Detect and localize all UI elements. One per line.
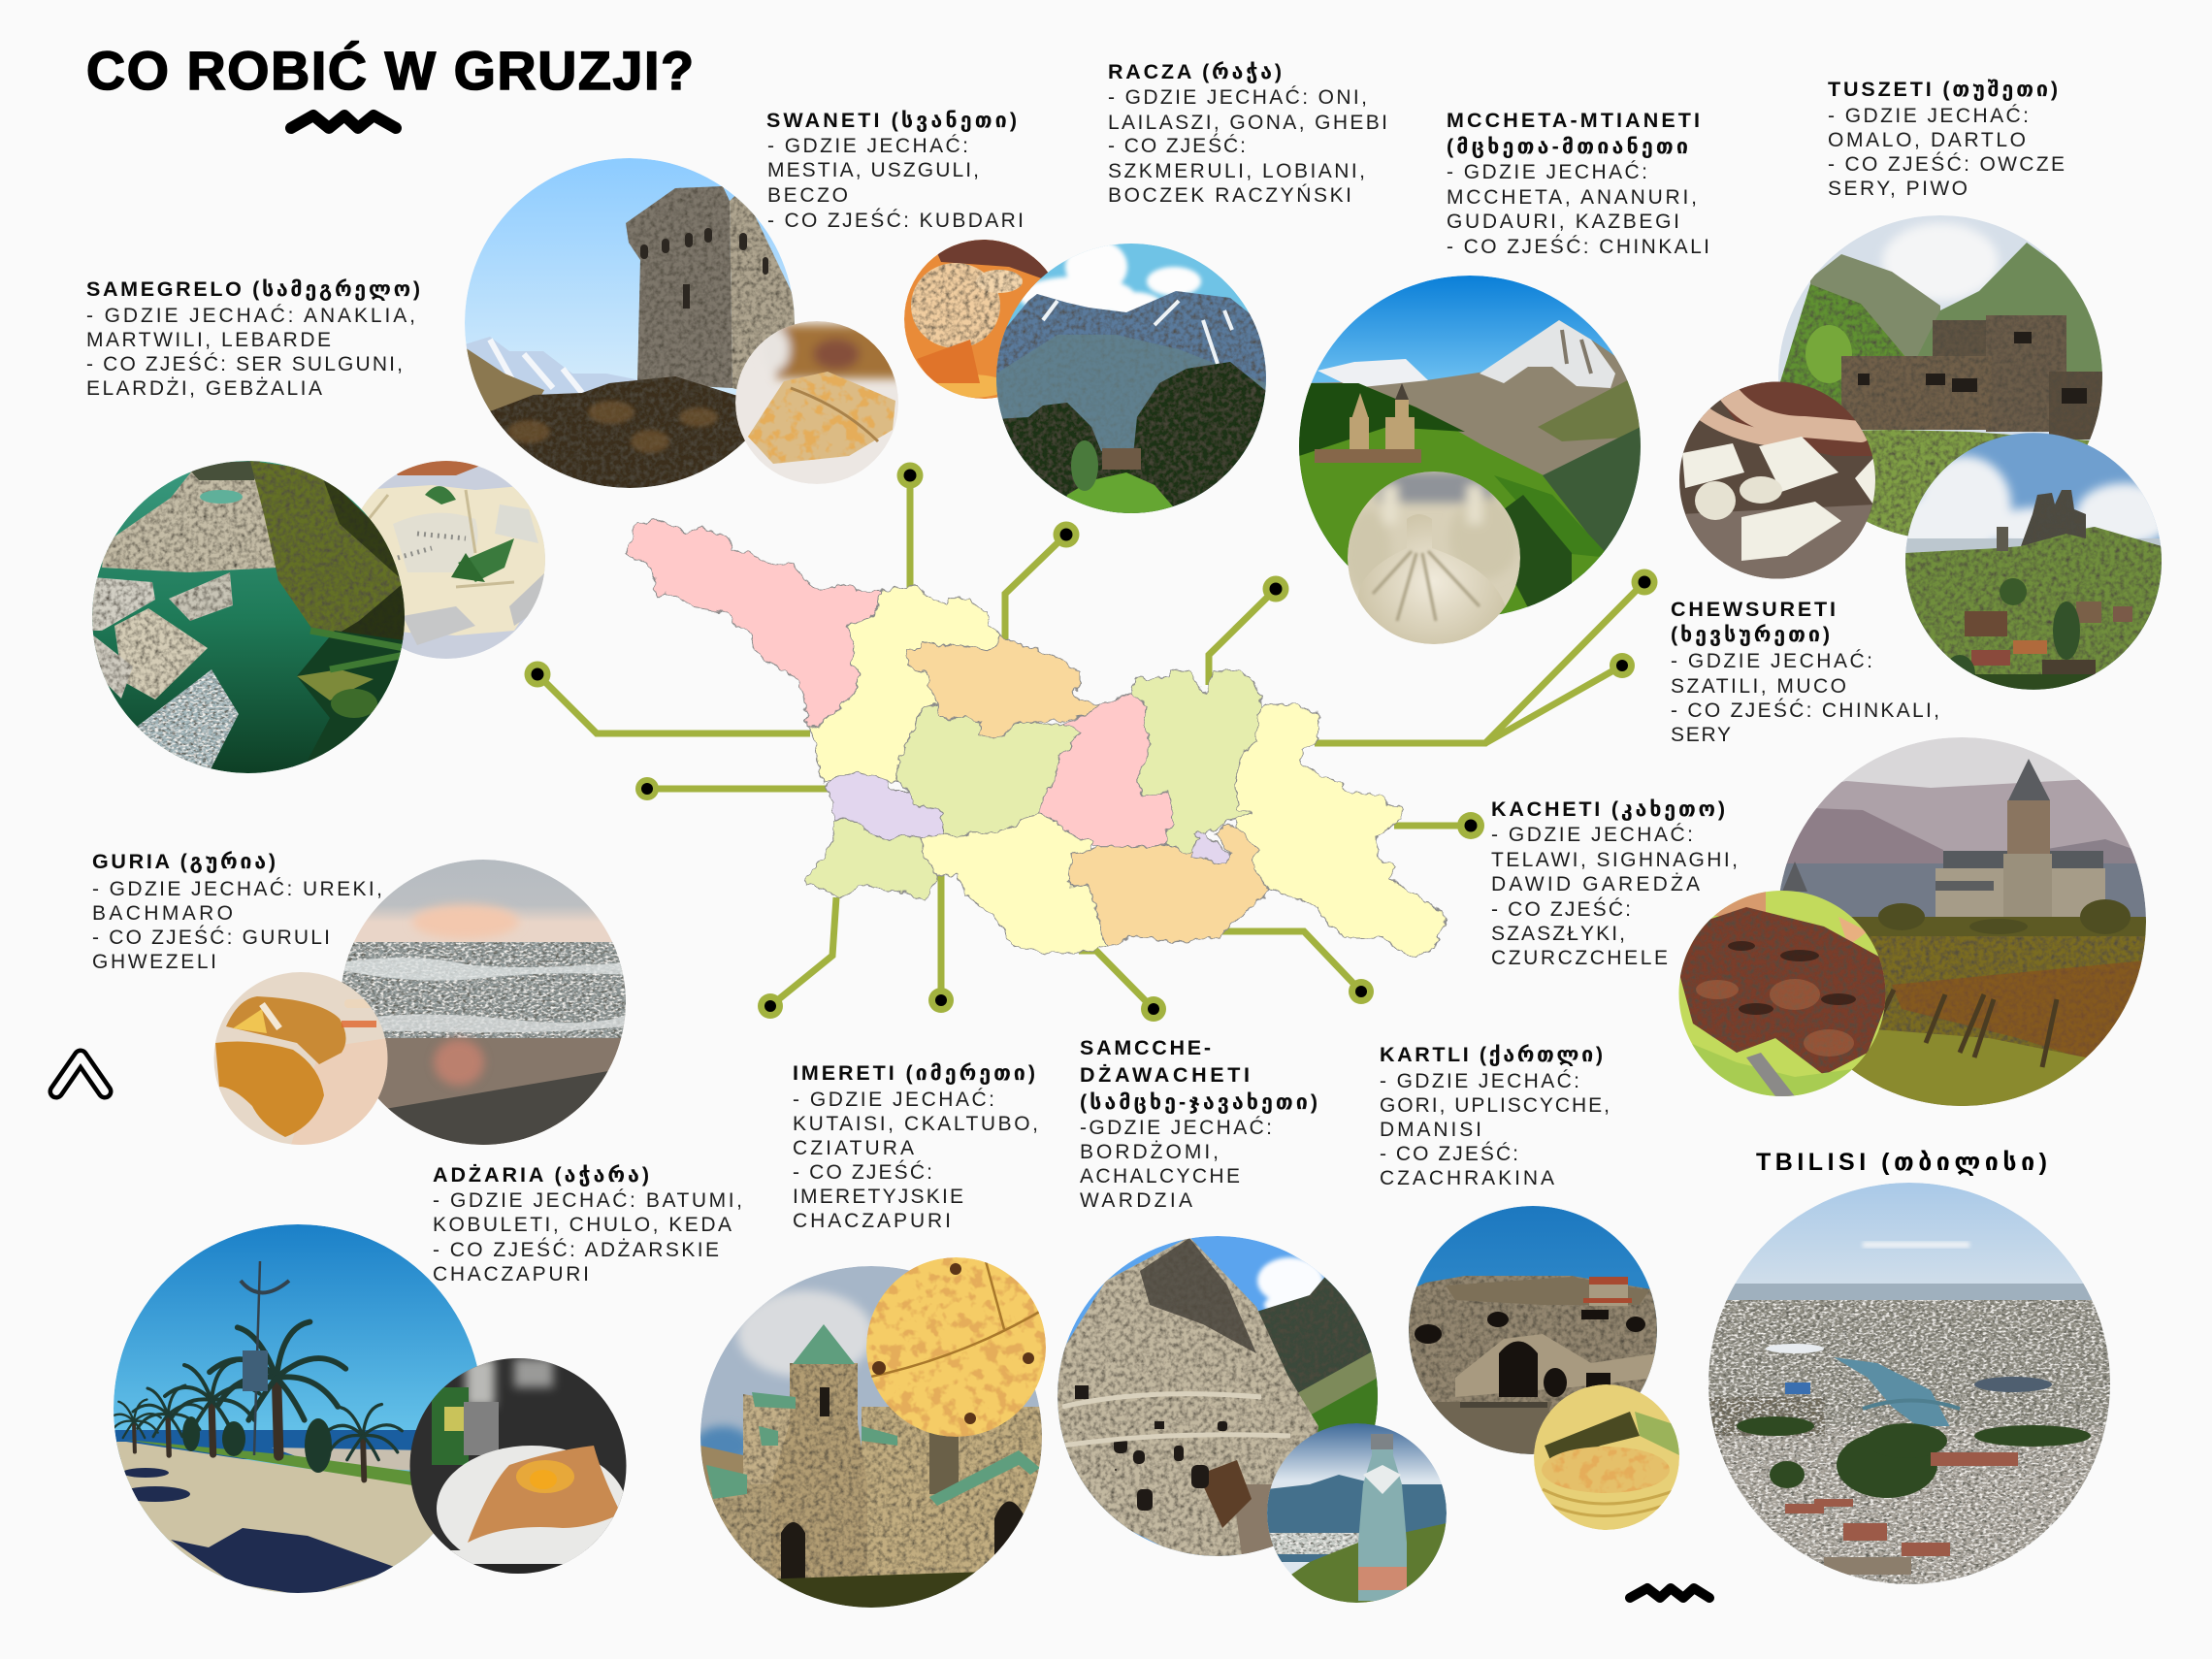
heading: Tbilisi: TBILISI (თბილისი) — [1756, 1149, 2047, 1176]
top rocks — [102, 466, 276, 572]
text block: Imereti: - GDZIE JECHAĆ: — [793, 1089, 994, 1111]
photo: Samegrelo food, cheese rolls — [361, 461, 545, 659]
map of Georgia regions — [626, 521, 1447, 958]
photo: Kacheti Alaverdi monastery and vineyards — [1779, 737, 2146, 1106]
sand — [341, 1038, 626, 1145]
brown hill — [467, 348, 544, 425]
title: CO ROBIĆ W GRUZJI? — [86, 41, 694, 101]
photo: Swaneti kubdari — [735, 321, 898, 484]
text block: Tuszeti: - GDZIE JECHAĆ: — [1828, 105, 2029, 127]
promenade — [114, 1442, 482, 1593]
text block: Swaneti: SWANETI (სვანეთი) — [766, 109, 1017, 132]
dumpling — [1358, 514, 1509, 649]
text block: Adzaria — [433, 1163, 742, 1285]
snow peaks — [1317, 359, 1428, 388]
text block: Mccheta-Mtianeti: GUDAURI, KAZBEGI — [1447, 211, 1679, 233]
roofs — [1785, 1452, 2018, 1575]
stone towers — [1841, 315, 2102, 439]
photo: Samcche Borjomi bottle — [1267, 1423, 1447, 1603]
region: Kwemo Kartli — [1067, 825, 1270, 946]
text block: Tuszeti: SERY, PIWO — [1828, 178, 1968, 200]
text block: Swaneti: MESTIA, USZGULI, — [767, 159, 979, 181]
mossy cliff — [250, 461, 405, 640]
text block: Adzaria: CHACZAPURI — [433, 1263, 589, 1285]
photo: Samegrelo canyon river — [92, 461, 405, 773]
text block: Racza: - GDZIE JECHAĆ: ONI, — [1108, 86, 1367, 109]
text block: Swaneti: BECZO — [767, 184, 848, 207]
mountains — [1777, 776, 2146, 873]
text block: Kacheti: KACHETI (კახეთო) — [1491, 797, 1725, 821]
green hill — [1905, 527, 2162, 690]
fern — [297, 631, 405, 773]
text block: Samcche-Dzawacheti: SAMCCHE- — [1080, 1036, 1211, 1059]
text block: Kartli: CZACHRAKINA — [1380, 1167, 1554, 1189]
text block: Imereti: IMERETI (იმერეთი) — [793, 1061, 1035, 1085]
text block: Mccheta-Mtianeti: - CO ZJEŚĆ: CHINKALI — [1447, 235, 1709, 258]
green foreground — [1862, 430, 2090, 536]
text block: Guria: GHWEZELI — [92, 951, 216, 973]
sea — [114, 1430, 482, 1459]
connector lines — [537, 475, 1644, 1009]
text block: Swaneti: - CO ZJEŚĆ: KUBDARI — [767, 209, 1024, 232]
region: Adzaria — [805, 820, 936, 900]
green hills — [1299, 383, 1641, 617]
text block: Chewsureti: CHEWSURETI — [1671, 598, 1836, 621]
text block: Mccheta-Mtianeti — [1447, 109, 1709, 258]
trees — [996, 362, 1266, 513]
photo: Mccheta Gergeti church with Kazbegi — [1299, 276, 1641, 615]
grass — [700, 1570, 1042, 1608]
text block: Imereti: CHACZAPURI — [793, 1210, 951, 1232]
arched door — [781, 1387, 1025, 1581]
photo: Tbilisi panorama — [1708, 1183, 2110, 1584]
text block: Chewsureti: - CO ZJEŚĆ: CHINKALI, — [1671, 699, 1939, 722]
palm shadows — [120, 1468, 400, 1596]
text block: Racza: LAILASZI, GONA, GHEBI — [1108, 112, 1387, 134]
church — [1589, 1281, 1628, 1306]
photo: Kacheti szaszlyki — [1678, 891, 1886, 1096]
church — [1350, 383, 1415, 454]
text block: Racza — [1108, 60, 1387, 207]
water glitter — [133, 669, 239, 773]
palm trees — [210, 1321, 345, 1455]
river — [1834, 1357, 1960, 1446]
grey mountains — [1299, 320, 1641, 485]
text block: Mccheta-Mtianeti: MCCHETA-MTIANETI — [1447, 109, 1700, 132]
vineyard — [1777, 936, 2146, 1106]
text block: Adzaria: - CO ZJEŚĆ: ADŻARSKIE — [433, 1238, 719, 1261]
text block: Tuszeti — [1828, 78, 2065, 200]
photo: Tuszeti village — [1778, 215, 2102, 536]
text block: Samcche-Dzawacheti: DŻAWACHETI — [1080, 1063, 1250, 1087]
sea — [341, 942, 626, 1039]
photo: Kartli Uplisciche — [1409, 1206, 1657, 1454]
fortress — [2021, 490, 2086, 546]
text block: Guria: GURIA (გურია) — [92, 850, 276, 873]
text block: Tuszeti: TUSZETI (თუშეთი) — [1828, 78, 2058, 101]
text block: Chewsureti: (ხევსურეთი) — [1671, 623, 1830, 646]
text block: Adzaria: KOBULETI, CHULO, KEDA — [433, 1214, 732, 1236]
photo: Chewsureti fortress — [1905, 433, 2162, 690]
text block: Kacheti: - GDZIE JECHAĆ: — [1491, 824, 1693, 846]
text block: Racza: BOCZEK RACZYŃSKI — [1108, 184, 1351, 207]
region: Guria — [826, 773, 944, 839]
text block: Kartli: GORI, UPLISCYCHE, — [1380, 1094, 1610, 1117]
lamp pole — [241, 1261, 289, 1455]
text block: Mccheta-Mtianeti: - GDZIE JECHAĆ: — [1447, 161, 1647, 183]
photo: Guria sea at sunset — [342, 860, 626, 1145]
region: Kacheti — [1235, 703, 1447, 958]
region: Samegrelo — [626, 521, 881, 729]
bottle — [1358, 1436, 1407, 1601]
houses — [1944, 578, 2132, 694]
grass — [1062, 472, 1179, 513]
text block: Kartli — [1380, 1043, 1610, 1189]
connector end dots — [524, 462, 1657, 1022]
photo: Swaneti tower — [465, 158, 795, 488]
text block: Chewsureti: - GDZIE JECHAĆ: — [1671, 650, 1872, 672]
monastery — [1936, 759, 2105, 920]
bushes — [182, 1416, 332, 1473]
text block: Samcche-Dzawacheti: BORDŻOMI, — [1080, 1141, 1219, 1163]
region: Samcche-Dzawacheti — [922, 812, 1105, 954]
text block: Samegrelo: SAMEGRELO (სამეგრელო) — [86, 277, 420, 301]
region: Racza — [906, 634, 1099, 738]
text block: Samegrelo: MARTWILI, LEBARDE — [86, 329, 331, 351]
text block: Adzaria: ADŻARIA (აჭარა) — [433, 1163, 649, 1187]
trees — [1737, 1416, 2091, 1498]
text block: Samegrelo — [86, 277, 420, 400]
photo: Racza mountains — [996, 244, 1266, 513]
icon: bottom zigzag — [1630, 1588, 1709, 1598]
far mountains — [1256, 1266, 1378, 1426]
text block: Chewsureti — [1671, 598, 1939, 746]
beach — [272, 1448, 482, 1475]
lower district — [1708, 1426, 2110, 1584]
text block: Guria — [92, 850, 382, 973]
text block: Swaneti: - GDZIE JECHAĆ: — [767, 135, 968, 157]
text block: Samegrelo: ELARDŻI, GEBŻALIA — [86, 377, 322, 400]
text block: Mccheta-Mtianeti: (მცხეთა-მთიანეთი — [1447, 135, 1688, 158]
region: Swaneti — [808, 585, 1002, 784]
text block: Kacheti: TELAWI, SIGHNAGHI, — [1491, 849, 1738, 871]
text block: Racza: RACZA (რაჭა) — [1108, 60, 1282, 83]
text block: Racza: - CO ZJEŚĆ: — [1108, 134, 1246, 157]
house — [1102, 448, 1141, 470]
text block: Kartli: - CO ZJEŚĆ: — [1380, 1142, 1518, 1165]
green roofs and cone — [706, 1324, 1040, 1506]
region: Mccheta-Mtianeti — [1132, 669, 1263, 854]
text block: Adzaria: - GDZIE JECHAĆ: BATUMI, — [433, 1189, 742, 1212]
photo: Guria ghwezeli pastries — [213, 972, 388, 1145]
text block: Imereti: CZIATURA — [793, 1137, 914, 1159]
text block: Kartli: - GDZIE JECHAĆ: — [1380, 1070, 1579, 1092]
mountains — [996, 291, 1266, 475]
photo: Adzaria chaczapuri — [409, 1358, 627, 1574]
city — [1708, 1300, 2110, 1426]
photo: Imereti chaczapuri — [866, 1257, 1046, 1437]
snowy mountains — [465, 337, 640, 412]
icon: title zigzag — [291, 115, 396, 128]
text block: Kacheti: CZURCZCHELE — [1491, 947, 1668, 969]
tower — [626, 186, 732, 388]
region: Imereti — [897, 705, 1079, 836]
text block: Samcche-Dzawacheti: ACHALCYCHE — [1080, 1165, 1240, 1187]
text block: Chewsureti: SERY — [1671, 724, 1731, 746]
text block: Kacheti — [1491, 797, 1738, 969]
text block: Samcche-Dzawacheti: -GDZIE JECHAĆ: — [1080, 1117, 1272, 1139]
text block: Samcche-Dzawacheti: WARDZIA — [1080, 1189, 1192, 1212]
mountains — [1267, 1475, 1447, 1562]
distant ridge — [1708, 1284, 2110, 1303]
clouds — [1019, 244, 1204, 312]
text block: Imereti: - CO ZJEŚĆ: — [793, 1160, 932, 1184]
photo: Samcche Wardzia rock city — [1057, 1236, 1378, 1556]
clouds — [1905, 450, 2160, 550]
text block: Swaneti — [766, 109, 1024, 232]
text block: Guria: - CO ZJEŚĆ: GURULI — [92, 926, 330, 949]
photo: Racza food, szkmeruli — [904, 240, 1048, 399]
rock — [1409, 1276, 1657, 1454]
photo: Tuszeti cheese — [1679, 382, 1875, 578]
photo: Mccheta chinkali — [1348, 472, 1520, 644]
photo: Imereti Bagrati cathedral — [700, 1266, 1042, 1608]
green slope — [1780, 284, 1905, 406]
left rocks — [92, 577, 155, 631]
cathedral walls — [700, 1446, 743, 1591]
green hill — [1267, 1523, 1447, 1603]
text block: Guria: BACHMARO — [92, 902, 233, 925]
region: Kartli — [1038, 694, 1175, 847]
photo: Kartli czachrakina — [1534, 1384, 1679, 1530]
text block: Mccheta-Mtianeti: MCCHETA, ANANURI, — [1447, 186, 1697, 209]
text block: Kacheti: DAWID GAREDŻA — [1491, 873, 1700, 895]
text block: Samcche-Dzawacheti — [1080, 1036, 1317, 1212]
region: Tbilisi — [1191, 832, 1232, 863]
text block: Samegrelo: - CO ZJEŚĆ: SER SULGUNI, — [86, 352, 403, 375]
cliff — [1057, 1237, 1318, 1562]
photo: Adzaria Batumi promenade — [114, 1224, 477, 1593]
text block: Kartli: DMANISI — [1380, 1119, 1481, 1141]
caves — [1075, 1385, 1227, 1511]
modern hall — [1974, 1377, 2052, 1392]
text block: Imereti — [793, 1061, 1038, 1232]
text block: Samegrelo: - GDZIE JECHAĆ: ANAKLIA, — [86, 305, 415, 327]
text block: Kacheti: - CO ZJEŚĆ: — [1491, 897, 1631, 921]
text block: Guria: - GDZIE JECHAĆ: UREKI, — [92, 878, 382, 900]
text block: Imereti: KUTAISI, CKALTUBO, — [793, 1113, 1038, 1135]
mountains — [1810, 254, 1940, 356]
text block: Imereti: IMERETYJSKIE — [793, 1186, 963, 1208]
text block: Kartli: KARTLI (ქართლი) — [1380, 1043, 1603, 1066]
text block: Kacheti: SZASZŁYKI, — [1491, 923, 1625, 945]
caves — [1415, 1310, 1645, 1397]
tree line — [1777, 917, 2146, 940]
icon: chevron — [56, 1057, 105, 1091]
text block: Tuszeti: - CO ZJEŚĆ: OWCZE — [1828, 152, 2065, 176]
dark ground — [490, 376, 745, 488]
text block: Racza: SZKMERULI, LOBIANI, — [1108, 160, 1365, 182]
text block: Chewsureti: SZATILI, MUCO — [1671, 675, 1846, 698]
text block: Tuszeti: OMALO, DARTLO — [1828, 129, 2026, 151]
tower — [771, 1363, 867, 1581]
text block: Samcche-Dzawacheti: (სამცხე-ჯავახეთი) — [1080, 1090, 1317, 1114]
